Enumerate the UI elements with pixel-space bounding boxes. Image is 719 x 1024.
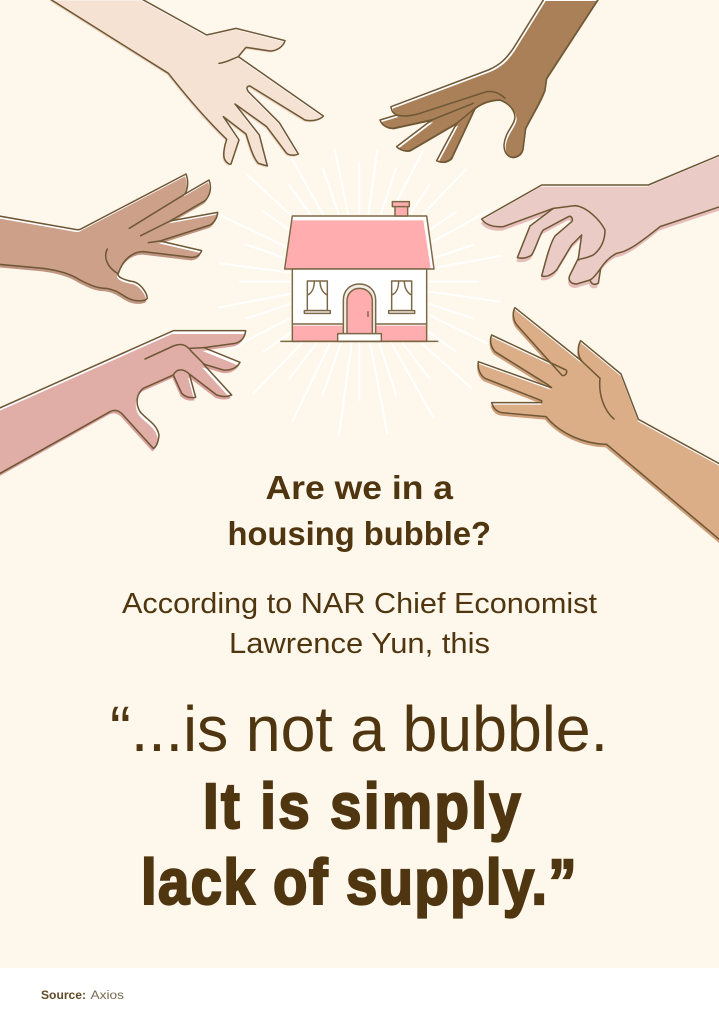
heading	[228, 469, 491, 552]
hand: right, pale pink skin	[480, 154, 719, 288]
hand: lower right, warm tan skin	[477, 306, 719, 543]
quote text: “...is not a bubble.	[110, 693, 608, 765]
heading: Are we in a	[266, 469, 454, 506]
quote text: It is simply	[203, 770, 521, 842]
source line: Axios	[90, 990, 124, 1002]
intro text: According to NAR Chief Economist	[122, 588, 597, 620]
source line	[41, 990, 124, 1002]
hand: top right, dark brown skin	[379, 0, 599, 164]
icon: house	[280, 202, 438, 341]
heading: housing bubble?	[228, 515, 491, 552]
hand: left upper, tan rose skin	[0, 173, 218, 304]
intro text	[122, 588, 597, 660]
quote text	[110, 693, 608, 918]
light rays around house	[220, 150, 500, 435]
source line: Source:	[41, 990, 86, 1002]
hand: top left, light skin	[49, 0, 324, 168]
footer	[0, 968, 719, 1024]
hand: left lower, rose skin	[0, 330, 246, 476]
quote text: lack of supply.”	[141, 846, 577, 918]
intro text: Lawrence Yun, this	[229, 628, 490, 660]
